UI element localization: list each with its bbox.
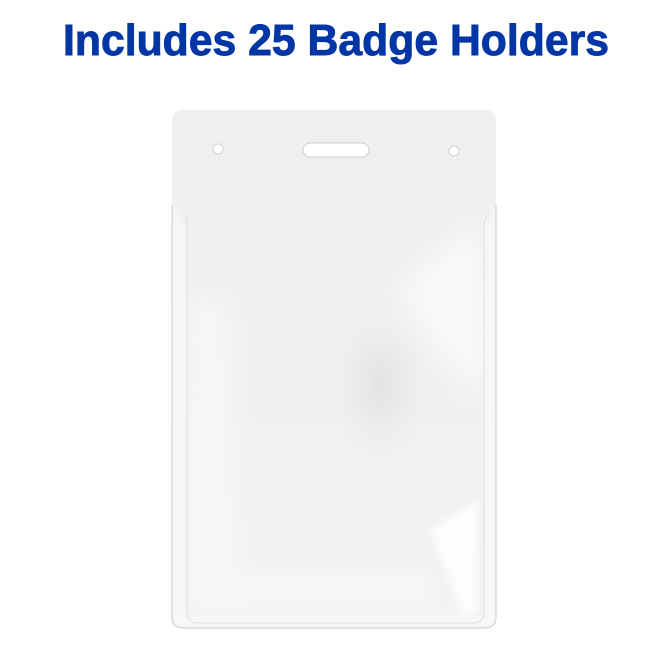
holder body — [172, 110, 496, 628]
center slot — [303, 143, 369, 157]
left punch hole — [213, 144, 223, 154]
right punch hole — [449, 146, 459, 156]
lighting on plastic — [363, 254, 476, 610]
badge holder — [172, 110, 496, 628]
pocket seam — [184, 213, 489, 623]
title: Includes 25 Badge Holders — [63, 17, 609, 65]
outer edge — [172, 205, 496, 628]
